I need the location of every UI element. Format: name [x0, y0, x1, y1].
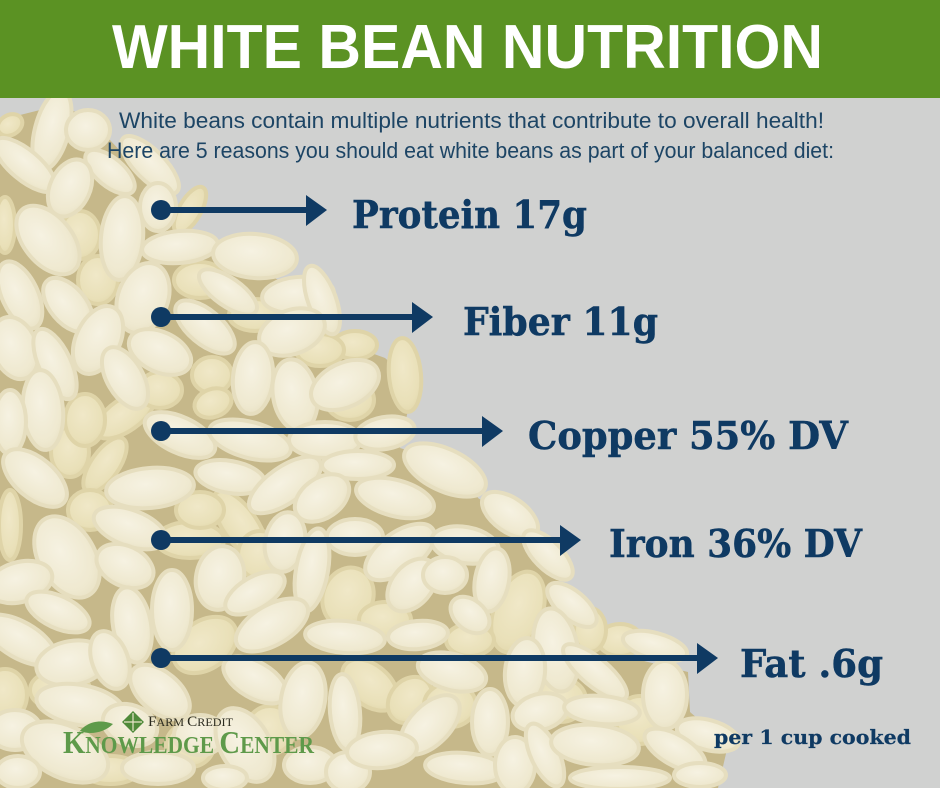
- arrow: copper: [151, 416, 503, 447]
- title: WHITE BEAN NUTRITION: [112, 13, 823, 82]
- icon: diamond: [122, 711, 144, 733]
- serving note: per 1 cup cooked: [714, 725, 911, 749]
- intro text: White beans contain multiple nutrients that contribute to overall health!: [119, 108, 824, 133]
- label: copper: Copper 55% DV: [528, 413, 849, 458]
- label: fat: Fat .6g: [740, 641, 883, 686]
- label: iron: Iron 36% DV: [609, 521, 863, 566]
- label: fiber: Fiber 11g: [463, 299, 658, 344]
- farm credit wordmark: FARM CREDIT: [148, 714, 234, 730]
- arrow: fiber: [151, 302, 433, 333]
- arrow: iron: [151, 525, 581, 556]
- label: protein: Protein 17g: [352, 192, 587, 237]
- intro text: Here are 5 reasons you should eat white beans as part of your balanced diet:: [107, 138, 834, 163]
- arrow: fat: [151, 643, 718, 674]
- knowledge center wordmark: KNOWLEDGE CENTER: [63, 724, 315, 760]
- intro text: [107, 108, 834, 163]
- arrow: protein: [151, 195, 327, 226]
- icon: leaf: [77, 721, 113, 735]
- bean pile photo: [0, 86, 743, 788]
- title banner: [0, 0, 940, 98]
- logo: Farm Credit Knowledge Center: [63, 711, 315, 760]
